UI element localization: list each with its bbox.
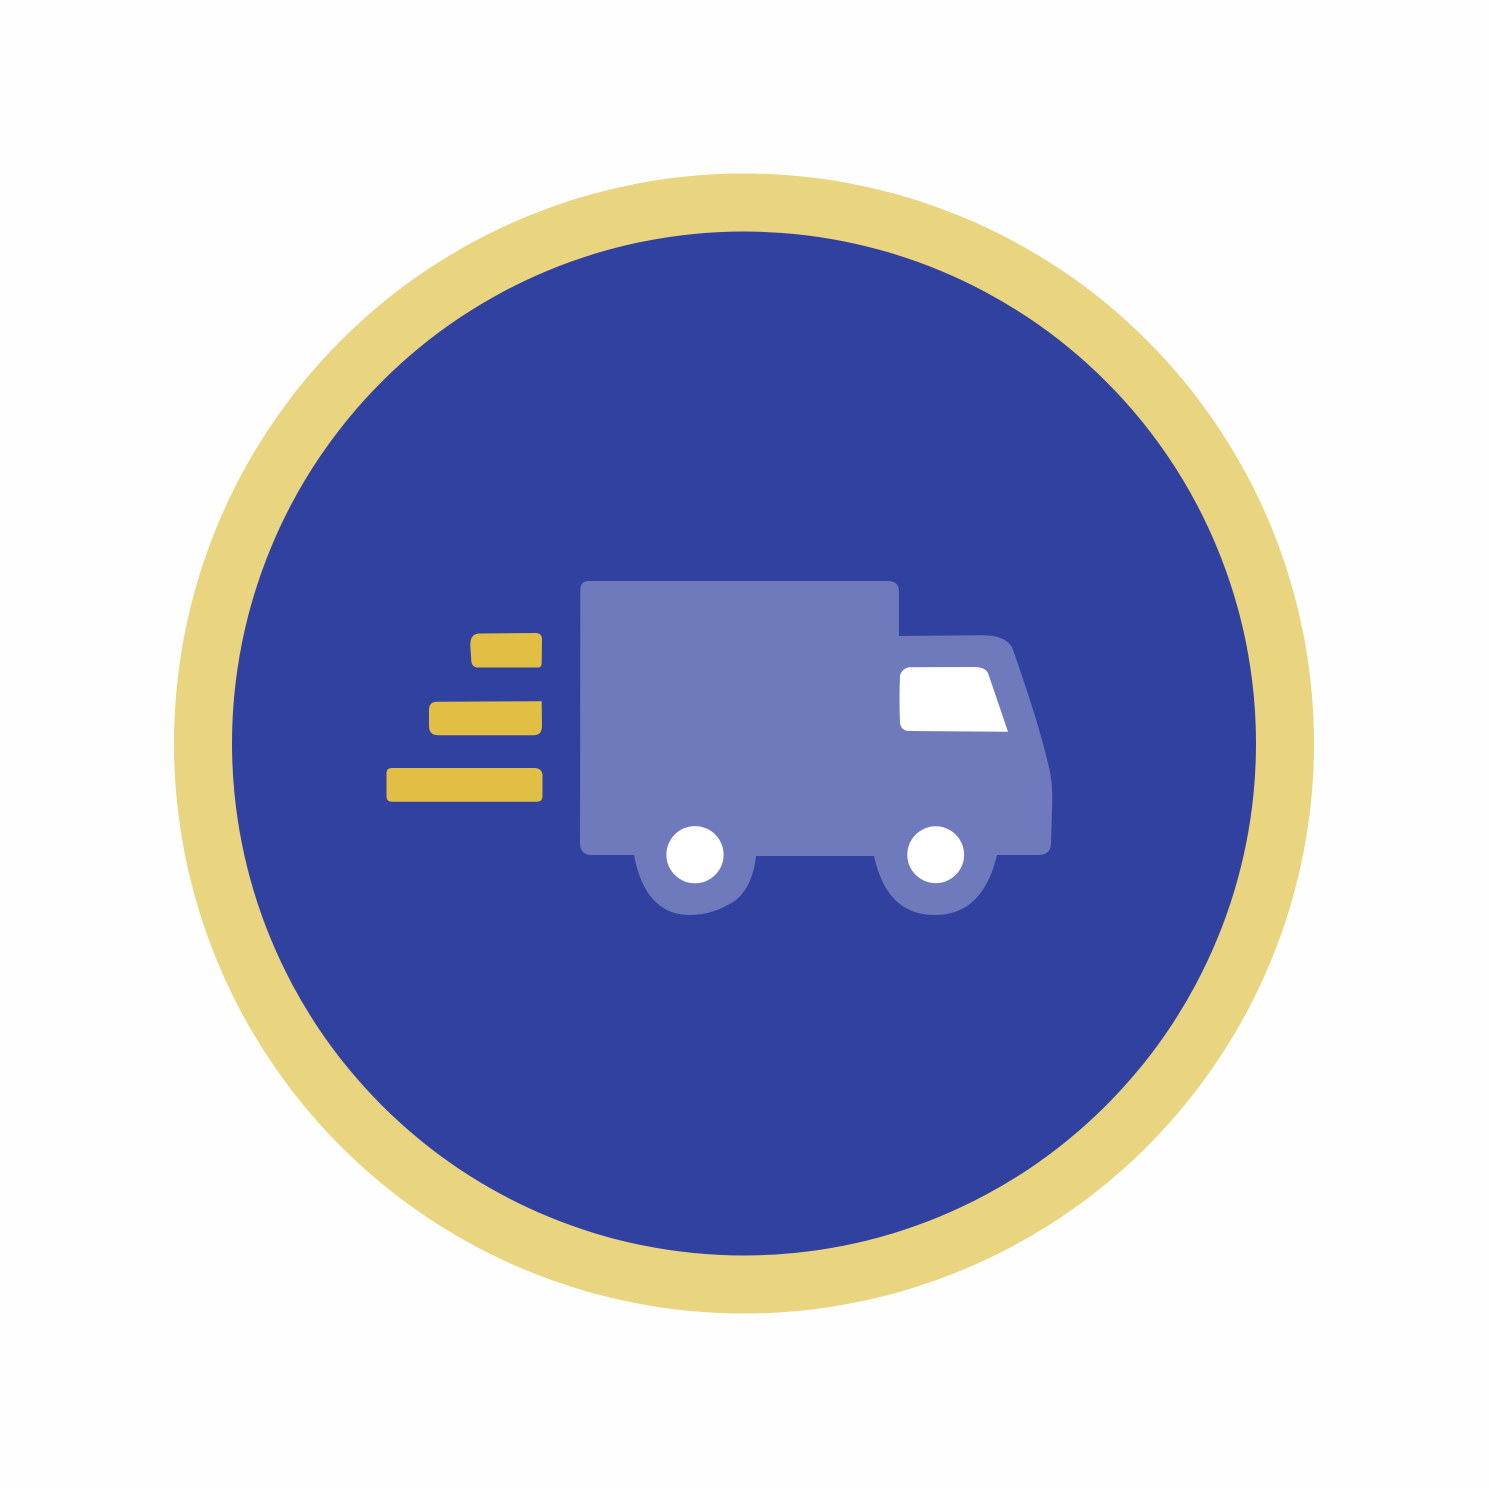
icon: truck (580, 581, 1052, 915)
truck body (580, 581, 1052, 915)
icon: speed lines (386, 633, 542, 802)
outer gold ring (174, 174, 1314, 1314)
truck window (900, 667, 1008, 732)
rear wheel hub (907, 826, 964, 883)
front wheel hub (666, 826, 724, 883)
blue disc (232, 232, 1256, 1256)
